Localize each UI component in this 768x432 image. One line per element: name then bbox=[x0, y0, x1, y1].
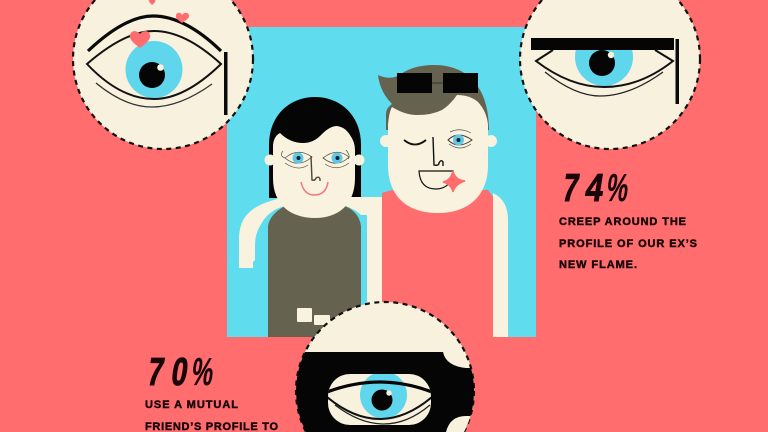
woman left eye bbox=[281, 151, 312, 168]
pupil bbox=[139, 62, 165, 88]
under eye line bbox=[96, 83, 212, 107]
panel: masked eye circle bbox=[280, 302, 480, 432]
number bbox=[560, 165, 632, 210]
circle bbox=[73, 0, 253, 149]
man arm under woman bbox=[367, 215, 382, 337]
sunglasses bbox=[397, 73, 478, 93]
figure: man bbox=[378, 65, 508, 337]
medium heart bbox=[176, 13, 189, 23]
description: USE A MUTUAL bbox=[145, 399, 238, 411]
number: 7 bbox=[560, 167, 582, 210]
figure: woman bbox=[239, 97, 382, 337]
brow bbox=[88, 16, 221, 51]
vertical bar bbox=[224, 52, 228, 115]
sparkle bbox=[443, 171, 465, 192]
circle bbox=[296, 302, 474, 432]
large heart bbox=[130, 31, 150, 48]
panel: blue square bbox=[227, 27, 536, 337]
woman dress bbox=[268, 206, 361, 337]
lid bar bbox=[531, 38, 674, 50]
number: 4 bbox=[583, 166, 607, 210]
under eye line bbox=[545, 72, 663, 96]
man open eye bbox=[448, 130, 472, 148]
stat: 70% bbox=[145, 349, 278, 432]
iris bbox=[360, 372, 407, 418]
man face bbox=[388, 95, 488, 213]
eye outline bbox=[536, 50, 673, 87]
lower lid bbox=[327, 397, 432, 419]
woman hair bbox=[269, 97, 361, 198]
man nose bbox=[433, 137, 443, 166]
vertical bar bbox=[676, 39, 679, 104]
man hair bbox=[378, 65, 489, 130]
pupil bbox=[372, 390, 392, 410]
man wink bbox=[404, 140, 426, 144]
woman right eye bbox=[323, 150, 349, 168]
number: % bbox=[189, 349, 217, 393]
highlight bbox=[608, 52, 614, 58]
panel: suspicious eye circle bbox=[520, 0, 700, 149]
number: 7 bbox=[145, 351, 167, 394]
panel: heart eye circle bbox=[73, 0, 253, 149]
description bbox=[145, 399, 278, 432]
upper lid bbox=[327, 382, 432, 392]
eye window bbox=[327, 372, 432, 425]
number: % bbox=[604, 165, 632, 209]
eyelids bbox=[87, 31, 221, 99]
woman ears bbox=[264, 154, 364, 166]
woman nose bbox=[311, 156, 320, 181]
small heart bbox=[149, 0, 155, 5]
mask bbox=[296, 352, 474, 432]
description: CREEP AROUND THE bbox=[559, 216, 686, 228]
woman hand bbox=[297, 308, 330, 325]
iris bbox=[575, 50, 633, 86]
stat: 74% bbox=[559, 165, 697, 271]
number: 0 bbox=[169, 351, 191, 394]
woman face bbox=[273, 126, 355, 218]
man shirt bbox=[382, 190, 493, 337]
under eye line bbox=[335, 405, 430, 424]
highlight bbox=[386, 390, 392, 396]
woman smile bbox=[301, 182, 328, 195]
description: PROFILE OF OUR EX’S bbox=[559, 238, 697, 250]
man right arm bbox=[493, 193, 508, 337]
iris bbox=[126, 41, 182, 98]
man ears bbox=[380, 135, 497, 147]
woman arm bbox=[239, 197, 382, 268]
number bbox=[145, 349, 217, 394]
description bbox=[559, 216, 697, 271]
highlight bbox=[157, 64, 164, 71]
pupil bbox=[589, 50, 615, 76]
man mouth bbox=[419, 171, 453, 189]
cheek highlight bbox=[446, 416, 470, 432]
description: NEW FLAME. bbox=[559, 259, 637, 271]
circle bbox=[520, 0, 700, 149]
